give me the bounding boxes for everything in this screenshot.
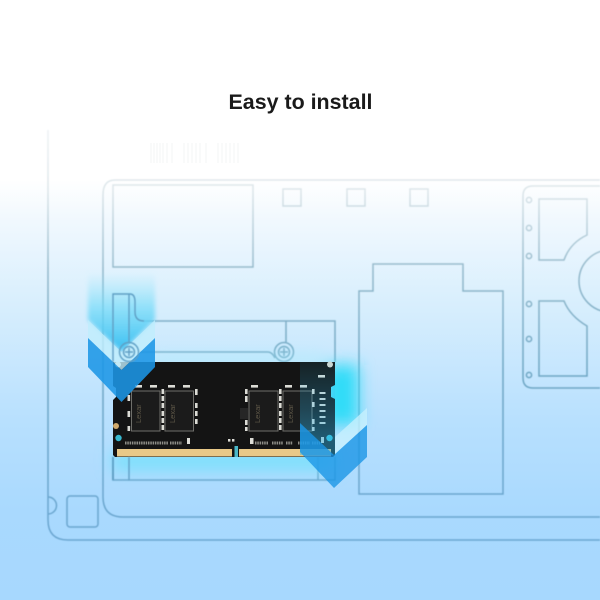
right bracket outline — [523, 186, 600, 388]
left arrow light band — [88, 320, 155, 370]
chip: left 1: Lexar — [134, 404, 143, 423]
small square pads — [283, 189, 428, 206]
bracket holes — [526, 197, 532, 378]
resistor rows — [125, 442, 320, 444]
square pad — [67, 496, 98, 527]
right chevron arrow — [300, 362, 367, 488]
memory slot lines over left arrow — [113, 294, 144, 480]
chip: right 1 — [249, 391, 278, 431]
outer board notch — [48, 497, 56, 514]
chip: right 2 — [283, 391, 312, 431]
surface mount parts — [128, 375, 326, 444]
inner board outline — [103, 180, 600, 517]
overlay on module end — [300, 362, 335, 455]
chip: left 1 — [132, 391, 160, 431]
chip: right 2: Lexar — [286, 404, 295, 423]
right arrow light band — [335, 408, 367, 454]
motherboard line drawing — [48, 130, 600, 540]
left chevron arrow — [88, 272, 155, 402]
central component outline — [359, 264, 503, 494]
chip: left 2: Lexar — [168, 404, 177, 423]
screw right — [274, 342, 294, 362]
small dark component — [240, 408, 248, 419]
bracket cutouts — [539, 199, 600, 376]
upper left socket — [113, 185, 253, 267]
chip: right 1: Lexar — [253, 404, 262, 423]
RAM module — [113, 362, 335, 457]
cyan glow behind module — [112, 355, 358, 470]
title: Easy to install — [228, 90, 372, 114]
outer board outline — [48, 130, 600, 540]
screw left — [120, 342, 138, 362]
memory slot right lines — [113, 321, 335, 480]
right arrow dark band — [300, 423, 367, 488]
chip: left 2 — [165, 391, 194, 431]
faint chip pins — [151, 143, 238, 163]
gold contacts — [117, 446, 331, 457]
left arrow gradient column — [88, 272, 155, 352]
mounting holes — [113, 362, 333, 441]
left arrow dark band — [88, 338, 155, 402]
PCB — [113, 362, 335, 457]
